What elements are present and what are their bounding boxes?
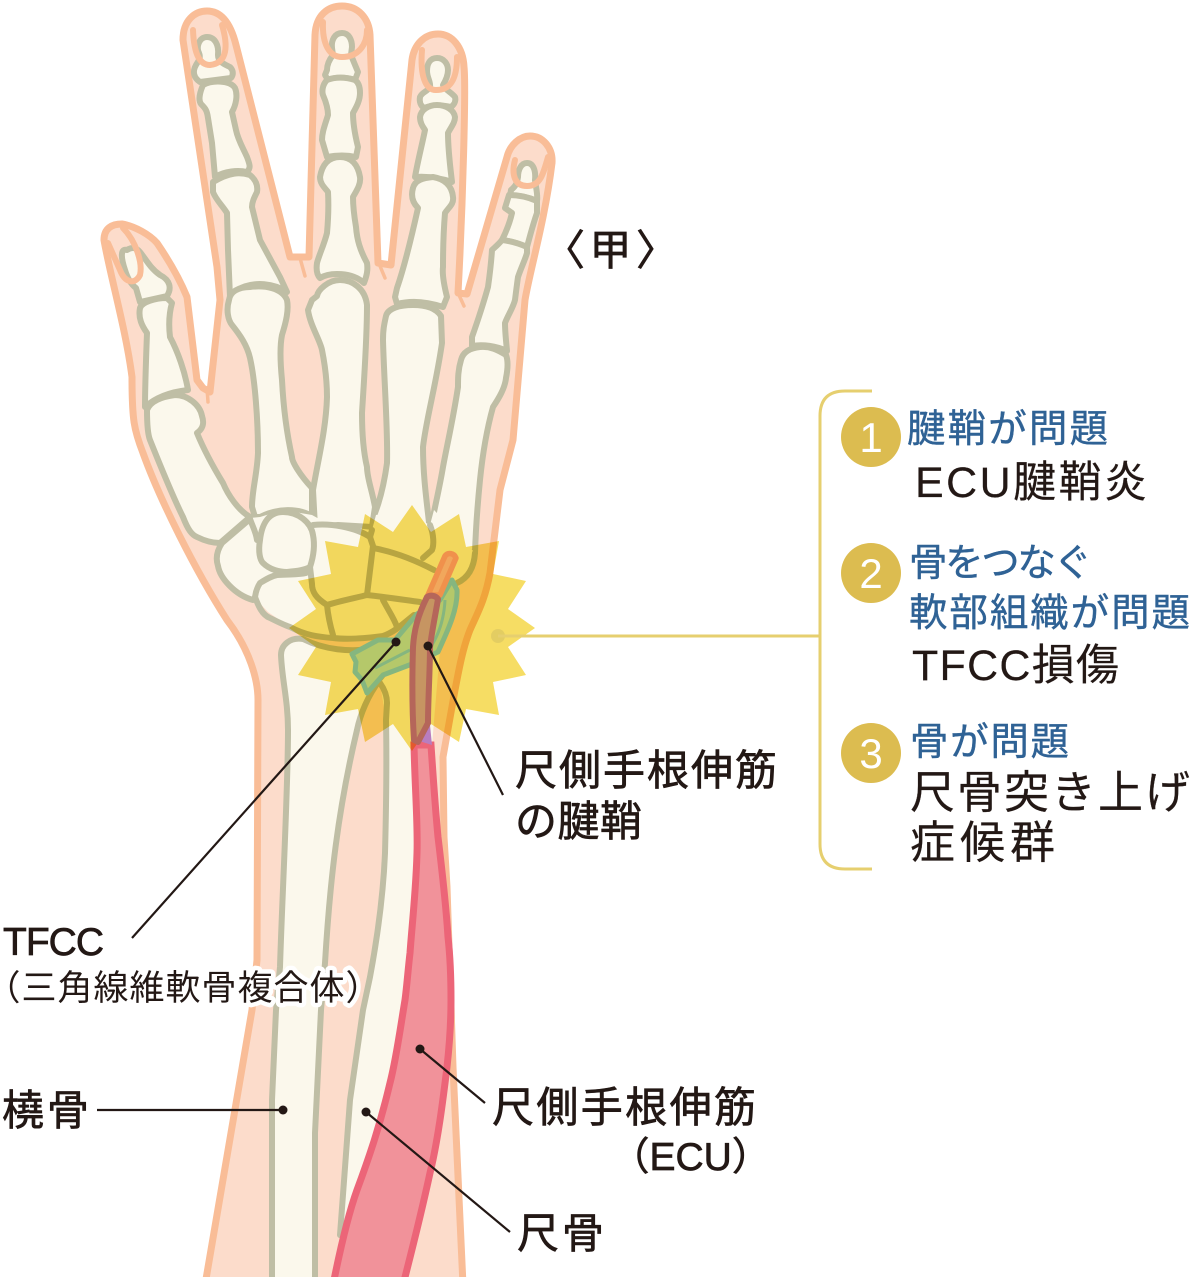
thumb bones	[122, 248, 250, 543]
label: ECU muscle: 尺側手根伸筋	[492, 1084, 756, 1131]
label: ECU muscle	[492, 1084, 756, 1179]
carpal bones	[217, 510, 475, 639]
purple tendon detail	[416, 725, 432, 745]
cause 1: ECU腱鞘炎	[915, 459, 1147, 507]
label: ECU tendon sheath	[515, 747, 777, 845]
leader: TFCC	[132, 638, 400, 938]
callout bracket	[820, 391, 872, 869]
cause 2	[841, 542, 1190, 690]
cause 3: 骨が問題	[910, 721, 1069, 764]
hand illustration	[104, 6, 552, 1277]
ECU muscle	[333, 745, 451, 1277]
ECU tendon sheath	[412, 596, 438, 742]
cause 1: 腱鞘が問題	[907, 408, 1108, 451]
cause 2: 軟部組織が問題	[909, 592, 1190, 635]
label: TFCC: （三角線維軟骨複合体）	[3, 969, 364, 1008]
ulna bone	[340, 650, 440, 1240]
label: ECU tendon sheath: の腱鞘	[515, 798, 642, 845]
middle finger bones	[308, 33, 375, 527]
cause 2: 2	[859, 550, 883, 597]
cause 1	[841, 407, 1147, 507]
label: ulna: 尺骨	[517, 1210, 604, 1257]
leader: tendon sheath	[424, 642, 503, 795]
extensor tendon	[428, 554, 456, 595]
radius bone	[272, 639, 395, 1277]
label: ECU muscle: （ECU）	[630, 1136, 751, 1179]
label: TFCC: TFCC	[3, 921, 104, 964]
cause 3: 尺骨突き上げ	[910, 767, 1190, 818]
cause 2: 骨をつなぐ	[909, 542, 1092, 585]
leader: ulna	[362, 1108, 510, 1232]
label: ECU tendon sheath: 尺側手根伸筋	[515, 747, 777, 794]
cause 3: 症候群	[910, 817, 1055, 868]
label: back of hand: 〈甲〉	[543, 227, 678, 274]
cause 3	[841, 721, 1190, 868]
TFCC green tissue	[352, 580, 457, 693]
callout connector	[491, 629, 820, 643]
pain burst	[289, 505, 535, 751]
cause 3: 3	[859, 730, 883, 777]
leader: radius	[97, 1106, 288, 1114]
cause 2: TFCC損傷	[912, 642, 1119, 690]
hand and forearm skin outline	[104, 6, 552, 1277]
index finger bones	[194, 37, 312, 517]
cause 1: 1	[859, 414, 883, 461]
leader: ECU	[416, 1044, 485, 1103]
label: radius: 橈骨	[2, 1087, 89, 1134]
little finger bones	[430, 163, 537, 553]
ring finger bones	[372, 58, 455, 532]
web creases between fingers	[207, 258, 464, 402]
fingernails	[108, 22, 548, 281]
label: TFCC	[3, 921, 364, 1008]
